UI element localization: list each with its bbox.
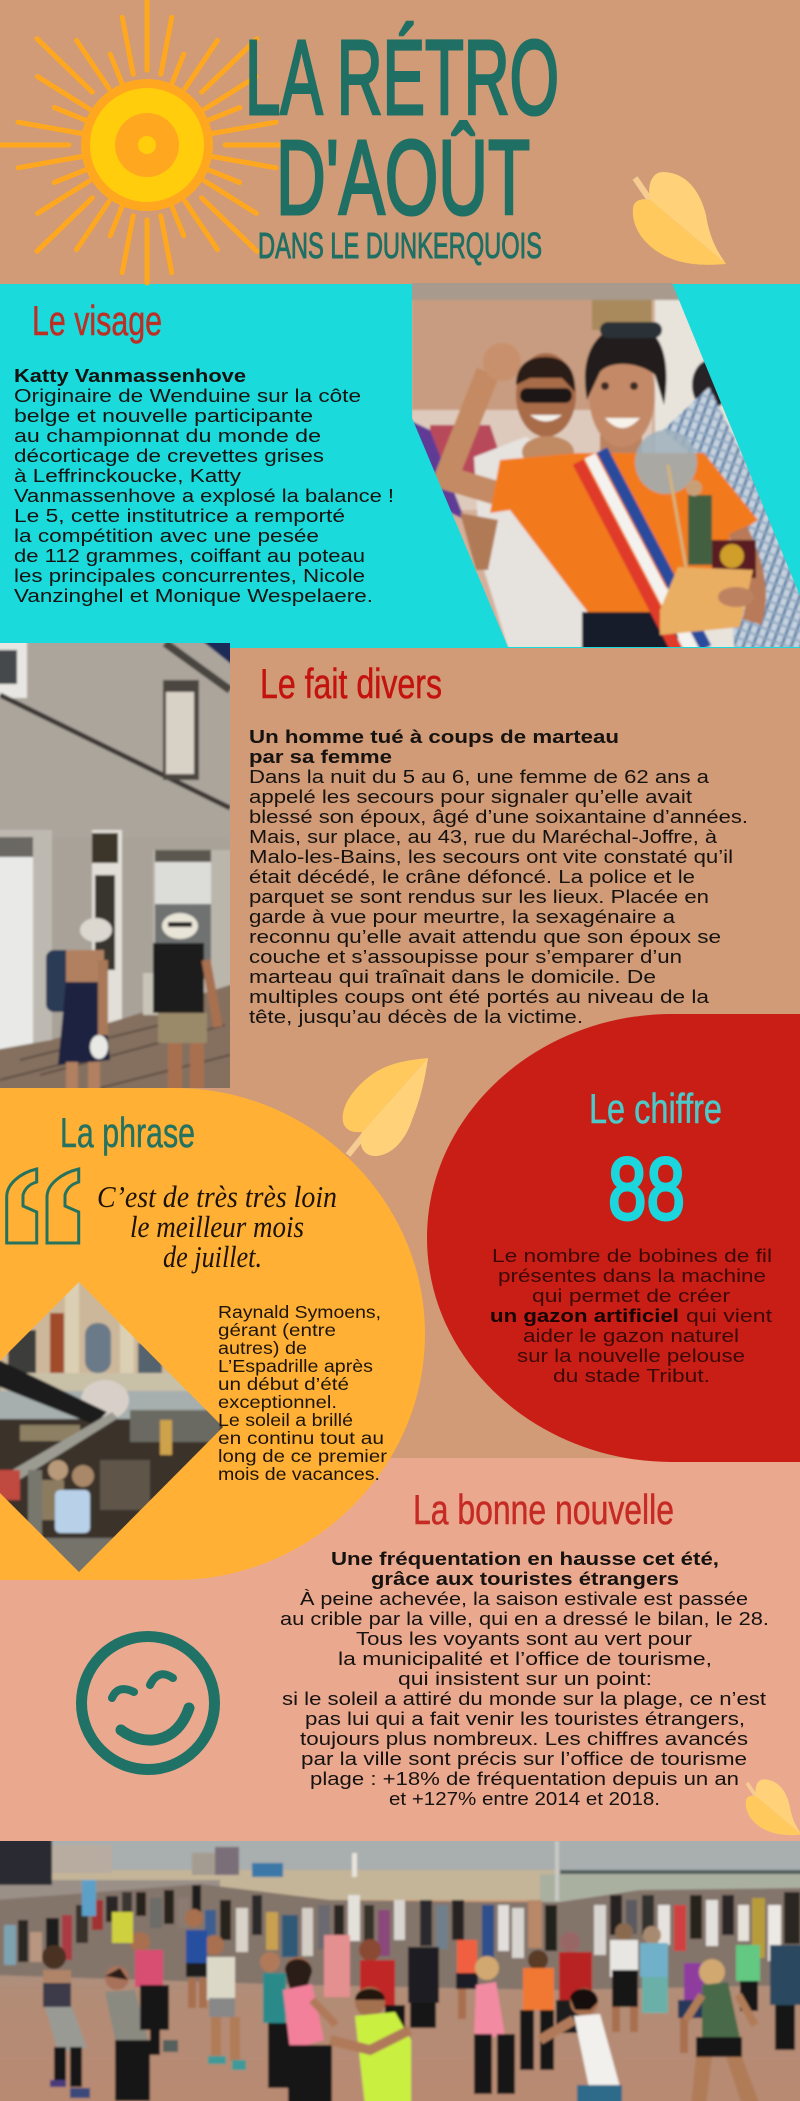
text block: Le chiffre: un gazon artificiel — [490, 1305, 679, 1326]
text block: La bonne nouvelle: au crible par la ville, qui en a dressé le bilan, le 28. — [280, 1608, 769, 1629]
heading: Le chiffre: Le chiffre — [589, 1085, 722, 1132]
title: LA RÉTRO — [245, 19, 559, 137]
text block: Le fait divers: Mais, sur place, au 43, rue du Maréchal-Joffre, à — [249, 826, 718, 847]
dancer: neon yellow shirt — [330, 1987, 411, 2101]
dancer: orange top — [520, 1950, 554, 2070]
text block: Le fait divers: couche et s’assoupisse pour s’emparer d’un — [249, 946, 682, 967]
text block: Raynald Symoens: un début d’été — [218, 1374, 349, 1394]
text block: Le chiffre: sur la nouvelle pelouse — [517, 1345, 745, 1366]
title — [245, 19, 559, 266]
text block: Le visage: la compétition avec une pesée — [14, 525, 319, 546]
text block: Le visage — [14, 365, 394, 606]
text block: La bonne nouvelle — [280, 1548, 769, 1809]
panel: teal band for Le visage — [0, 284, 800, 648]
icon: leaf middle — [343, 1058, 428, 1156]
dancer: teal top — [260, 1952, 291, 2088]
dancer: light blue top — [640, 1926, 668, 2013]
text block: Raynald Symoens: autres) de — [218, 1338, 307, 1358]
text block: La bonne nouvelle: À peine achevée, la saison estivale est passée — [300, 1588, 748, 1609]
dancer: grey top — [105, 1966, 150, 2101]
text block: Le visage: Katty Vanmassenhove — [14, 365, 246, 386]
dancer: pink tank right — [474, 1956, 515, 2094]
panel: salmon band for La bonne nouvelle — [0, 1458, 800, 1841]
text block: Le visage: à Leffrinckoucke, Katty — [14, 465, 242, 486]
text block: Le fait divers: blessé son époux, âgé d’une soixantaine d’années. — [249, 806, 748, 827]
text block: La bonne nouvelle: si le soleil a attiré du monde sur la plage, ce n’est — [282, 1688, 766, 1709]
background crowd — [4, 1885, 800, 1965]
text block: Le visage: décorticage de crevettes grises — [14, 445, 324, 466]
text block: La bonne nouvelle: Une fréquentation en hausse cet été, — [331, 1548, 719, 1569]
quote: C’est de très très loin — [97, 1179, 337, 1214]
photo: crowd dancing on the seafront — [0, 1835, 800, 2101]
text block: Raynald Symoens: exceptionnel. — [218, 1392, 337, 1412]
text block: Le visage: Vanmassenhove a explosé la balance ! — [14, 485, 394, 506]
title: DANS LE DUNKERQUOIS — [258, 225, 542, 266]
text block: La bonne nouvelle: grâce aux touristes étrangers — [371, 1568, 679, 1589]
dancer: white top grey shorts — [204, 1935, 246, 2070]
text block: Le chiffre: du stade Tribut. — [553, 1365, 710, 1386]
background: tan page — [0, 0, 800, 1460]
dancer: pink leggings back — [324, 1935, 350, 1997]
text block: Le visage: Vanzinghel et Monique Wespelaere. — [14, 585, 373, 606]
text block: Le visage: de 112 grammes, coiffant au poteau — [14, 545, 365, 566]
text block: Le chiffre: qui permet de créer — [532, 1285, 730, 1306]
heading: Le visage: Le visage — [32, 297, 162, 344]
text block: Le visage: belge et nouvelle participante — [14, 405, 313, 426]
icon: quotation marks — [7, 1169, 79, 1243]
text block: La bonne nouvelle: qui insistent sur un point: — [398, 1668, 652, 1689]
quote — [97, 1179, 337, 1274]
text block: Le chiffre — [490, 1245, 772, 1386]
dancer: orange tank — [457, 1940, 477, 1973]
icon: sun — [0, 0, 294, 283]
text block: Raynald Symoens: gérant (entre — [218, 1320, 336, 1340]
text block: Raynald Symoens: L’Espadrille après — [218, 1356, 373, 1376]
text block: La bonne nouvelle: Tous les voyants sont au vert pour — [356, 1628, 692, 1649]
dancer: white graphic tee — [610, 1923, 638, 2032]
text block: Le chiffre: aider le gazon naturel — [523, 1325, 739, 1346]
text block: Le fait divers: Un homme tué à coups de marteau — [249, 726, 619, 747]
dancer: green tank back — [736, 1945, 760, 1981]
text block: Le chiffre: qui vient — [686, 1305, 772, 1326]
dancer: white t-shirt front — [540, 1988, 622, 2101]
text block: Le chiffre: présentes dans la machine — [498, 1265, 766, 1286]
panel: La phrase orange shape — [0, 1088, 425, 1580]
text block: Le visage: Originaire de Wenduine sur la côte — [14, 385, 361, 406]
dancer: red shirt man — [556, 1932, 592, 2033]
text block: Raynald Symoens: Raynald Symoens, — [218, 1302, 381, 1322]
text block: Le fait divers: tête, jusqu’au décès de la victime. — [249, 1006, 583, 1027]
text block: Raynald Symoens — [218, 1302, 387, 1484]
text block: Le fait divers: garde à vue pour meurtre, la sexagénaire a — [249, 906, 676, 927]
text block: Raynald Symoens: mois de vacances. — [218, 1464, 380, 1484]
quote: de juillet. — [163, 1239, 262, 1274]
photo: street house with two passers-by — [0, 636, 236, 1092]
dancer: yellow top — [112, 1912, 133, 1943]
text block: Raynald Symoens: en continu tout au — [218, 1428, 384, 1448]
text block: La bonne nouvelle: la municipalité et l’office de tourisme, — [338, 1648, 712, 1669]
text block: Raynald Symoens: long de ce premier — [218, 1446, 387, 1466]
text block: Le fait divers: multiples coups ont été portés au niveau de la — [249, 986, 710, 1007]
heading: La bonne nouvelle: La bonne nouvelle — [413, 1486, 674, 1533]
dancer: far right — [770, 1945, 800, 2005]
icon: leaf bottom right — [746, 1779, 800, 1835]
icon: leaf top — [633, 172, 726, 265]
text block: La bonne nouvelle: toujours plus nombreux. Les chiffres avancés — [300, 1728, 748, 1749]
text block: Le fait divers: par sa femme — [249, 746, 392, 767]
dancer: black back — [408, 1947, 439, 2003]
text block: Le visage: au championnat du monde de — [14, 425, 321, 446]
text block: Le fait divers: Dans la nuit du 5 au 6, une femme de 62 ans a — [249, 766, 710, 787]
text block: Le fait divers: était décédé, le crâne défoncé. La police et le — [249, 866, 695, 887]
title: D'AOÛT — [276, 119, 530, 237]
dancer: blue tank — [185, 1909, 207, 2008]
text block: Le visage: les principales concurrentes, Nicole — [14, 565, 365, 586]
quote: le meilleur mois — [130, 1209, 304, 1244]
dancer: pink top — [130, 1932, 178, 2055]
heading: La phrase: La phrase — [60, 1109, 195, 1156]
heading: Le fait divers: Le fait divers — [260, 660, 442, 707]
photo: terrace in diamond — [0, 1276, 226, 1578]
text block: Le fait divers: parquet se sont rendus sur les lieux. Placée en — [249, 886, 709, 907]
big number: 88: 88 — [608, 1139, 685, 1238]
text block: Le fait divers: reconnu qu’elle avait attendu que son époux se — [249, 926, 721, 947]
dancer: pink tank front — [283, 1957, 336, 2101]
text block: La bonne nouvelle: plage : +18% de fréquentation depuis un an — [310, 1768, 739, 1789]
dancer: purple top — [684, 1963, 704, 2000]
photo: Katty Vanmassenhove — [405, 276, 800, 660]
text block: La bonne nouvelle: et +127% entre 2014 et 2018. — [389, 1788, 660, 1809]
text block: Le fait divers: marteau qui traînait dans le domicile. De — [249, 966, 656, 987]
text block: Le visage: Le 5, cette institutrice a remporté — [14, 505, 345, 526]
dancer: dark tank grey skirt — [42, 1945, 90, 2098]
panel: Le chiffre red shape — [427, 1014, 800, 1462]
text block: Raynald Symoens: Le soleil a brillé — [218, 1410, 353, 1430]
dancer: khaki tank front — [686, 1959, 760, 2101]
text block: La bonne nouvelle: par la ville sont précis sur l’office de tourisme — [301, 1748, 747, 1769]
text block: Le fait divers: Malo-les-Bains, les secours ont vite constaté qu’il — [249, 846, 733, 867]
text block: Le fait divers — [249, 726, 748, 1027]
text block: Le chiffre: Le nombre de bobines de fil — [492, 1245, 772, 1266]
text block: Le fait divers: appelé les secours pour signaler qu’elle avait — [249, 786, 692, 807]
text block: La bonne nouvelle: pas lui qui a fait venir les touristes étrangers, — [305, 1708, 745, 1729]
icon: smiley — [82, 1636, 214, 1770]
dancer: red top — [359, 1939, 405, 2040]
